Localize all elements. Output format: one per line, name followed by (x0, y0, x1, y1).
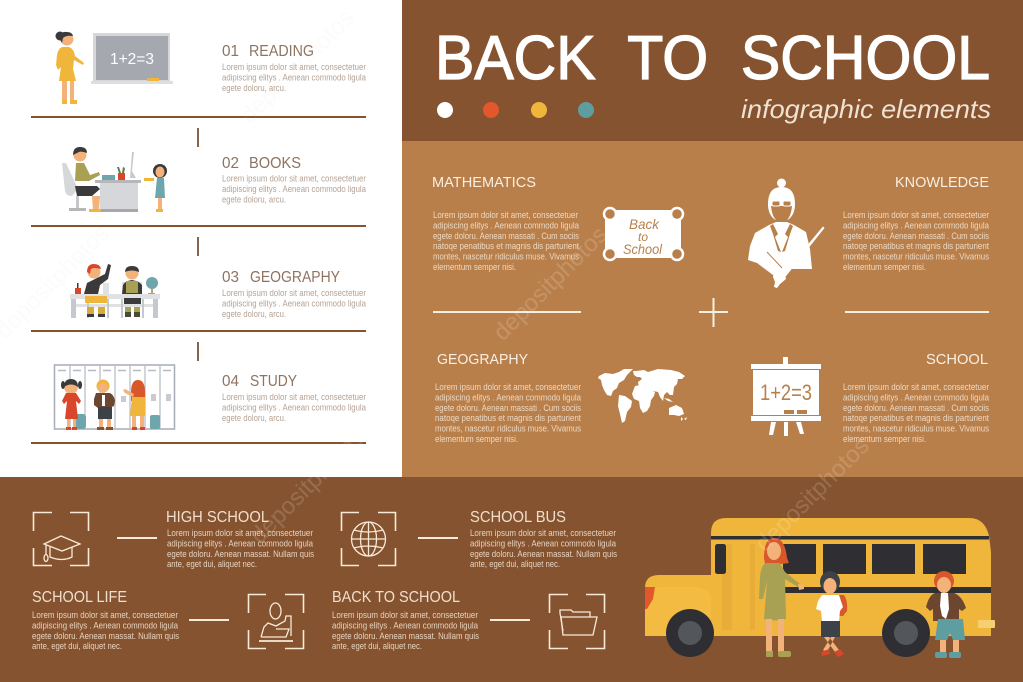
text block: montes, nascetur ridiculus muse. Vivamus (433, 252, 579, 262)
colour dots (437, 102, 594, 118)
text block: egete doloru, arcu. (222, 194, 286, 204)
text block: adipiscing elitys . Aenean commodo ligula (222, 72, 366, 82)
watermarks (0, 4, 875, 557)
text block: adipiscing elitys . Aenean commodo ligula (222, 184, 366, 194)
icon: graduation cap (34, 512, 88, 566)
text block: adipiscing elitys . Aenean commodo ligula (332, 620, 478, 630)
text block: Lorem ipsum dolor sit amet, consectetuer (222, 288, 366, 298)
icon: person at desk (248, 594, 304, 648)
bus (645, 518, 995, 657)
text block: adipiscing elitys . Aenean commodo ligula (222, 402, 366, 412)
panel: title band (402, 0, 1023, 141)
heading: GEOGRAPHY (437, 351, 528, 368)
illustration: teacher at chalkboard: 1+2=3 (110, 51, 154, 68)
text block (222, 288, 366, 319)
heading: 03 geography: 03 (222, 269, 239, 286)
text block: Lorem ipsum dolor sit amet, consectetuer (332, 610, 478, 620)
text block: Lorem ipsum dolor sit amet, consectetuer (167, 528, 313, 538)
panel: back to school (332, 589, 604, 651)
text block: Lorem ipsum dolor sit amet, consectetuer (435, 382, 581, 392)
text block: egete doloru. Aenean massati . Cum sociis (843, 403, 989, 413)
icon: back to school board: to (638, 230, 648, 244)
panel: books (62, 147, 366, 212)
text block: natoqe penatibus et magnis dis parturient (843, 413, 989, 423)
heading: MATHEMATICS (432, 174, 536, 191)
text block: adipiscing elitys . Aenean commodo ligula (433, 220, 579, 230)
text block: Lorem ipsum dolor sit amet, consectetuer (843, 210, 989, 220)
subtitle: infographic elements (741, 94, 991, 124)
panel: school (751, 351, 989, 444)
text block: egete doloru, arcu. (222, 413, 286, 423)
text block: egete doloru, arcu. (222, 83, 286, 93)
text block: montes, nascetur ridiculus muse. Vivamus (843, 424, 989, 434)
text block (222, 392, 366, 423)
icon: world map (598, 369, 687, 423)
watermarks: depositphotos (488, 221, 613, 346)
text block: natoqe penatibus et magnis dis parturient (843, 241, 989, 251)
text block: egete doloru. Aenean massat. Nullam quis (470, 549, 617, 559)
text block: adipiscing elitys . Aenean commodo ligula (435, 392, 581, 402)
text block: ante, eget dui, aliquet nec. (332, 641, 422, 651)
icon: globe (342, 512, 396, 566)
text block: adipiscing elitys . Aenean commodo ligula (222, 298, 366, 308)
text block (222, 62, 366, 93)
illustration: teacher at chalkboard (56, 32, 173, 104)
text block: Lorem ipsum dolor sit amet, consectetuer (222, 62, 366, 72)
panel: mathematics (432, 174, 683, 272)
text block: egete doloru. Aenean massat. Nullam quis (332, 631, 479, 641)
panel: books: BOOKS (249, 155, 301, 172)
icon: easel with sum (751, 357, 821, 436)
text block: montes, nascetur ridiculus muse. Vivamus (843, 252, 989, 262)
heading: SCHOOL LIFE (32, 589, 127, 606)
text block (32, 610, 179, 651)
text block: elementum semper nisi. (435, 434, 518, 444)
text block: adipiscing elitys . Aenean commodo ligula (843, 220, 989, 230)
text block: egete doloru. Aenean massati . Cum sociis (435, 403, 581, 413)
text block: elementum semper nisi. (843, 434, 926, 444)
text block: adipiscing elitys . Aenean commodo ligula (470, 538, 616, 548)
panel: study: STUDY (250, 373, 297, 390)
illustration: pupils at desk (70, 264, 160, 318)
text block: montes, nascetur ridiculus muse. Vivamus (435, 424, 581, 434)
text block: elementum semper nisi. (843, 262, 926, 272)
panel: subjects (402, 141, 1023, 477)
heading: 01 reading: 01 (222, 43, 239, 60)
text block: elementum semper nisi. (433, 262, 516, 272)
panel: geography (70, 264, 366, 319)
text block: Lorem ipsum dolor sit amet, consectetuer (222, 392, 366, 402)
panel: study (54, 365, 366, 430)
watermarks: depositphotos (750, 432, 875, 557)
text block (435, 382, 581, 444)
text block: adipiscing elitys . Aenean commodo ligula (843, 392, 989, 402)
panel: reading: READING (249, 43, 314, 60)
illustration: pupils at lockers (54, 365, 174, 430)
text block: egete doloru, arcu. (222, 309, 286, 319)
text block (470, 528, 617, 569)
panel: geography subject (435, 351, 687, 444)
text block (843, 210, 989, 272)
heading: 04 study: 04 (222, 373, 239, 390)
title: BACK TO SCHOOL (435, 24, 990, 93)
watermarks: depositphotos (245, 424, 370, 549)
icon: back to school board: School (623, 241, 663, 257)
icon: back to school board: Back (629, 216, 660, 232)
panel: reading (56, 32, 366, 104)
heading: BACK TO SCHOOL (332, 589, 460, 606)
text block: adipiscing elitys . Aenean commodo ligula (32, 620, 178, 630)
text block (222, 174, 366, 204)
text block: Lorem ipsum dolor sit amet, consectetuer (843, 382, 989, 392)
panel: high school (34, 509, 314, 569)
text block (332, 610, 479, 651)
pupil with brown jacket (926, 571, 966, 658)
text block (433, 210, 579, 272)
heading: SCHOOL (926, 351, 988, 368)
text block: ante, eget dui, aliquet nec. (167, 559, 257, 569)
text block: Lorem ipsum dolor sit amet, consectetuer (32, 610, 178, 620)
watermarks: depositphotos (235, 4, 360, 129)
panel: school life (32, 589, 304, 651)
text block: egete doloru. Aenean massati . Cum sociis (843, 231, 989, 241)
panel: school bus (342, 509, 617, 569)
icon: teacher with pointer (748, 178, 824, 288)
text block: Lorem ipsum dolor sit amet, consectetuer (433, 210, 578, 220)
illustration: teacher at desk with pupil (62, 147, 167, 212)
panel: geography: GEOGRAPHY (250, 269, 340, 286)
heading: 02 books: 02 (222, 155, 239, 172)
text block: natoqe penatibus et magnis dis parturient (435, 413, 581, 423)
text block (843, 382, 989, 444)
heading: HIGH SCHOOL (166, 509, 269, 526)
text block: egete doloru. Aenean massat. Nullam quis (167, 549, 314, 559)
text block: Lorem ipsum dolor sit amet, consectetuer (222, 174, 366, 184)
illustration: school bus with teacher and pupils (645, 518, 995, 658)
heading: KNOWLEDGE (895, 174, 989, 191)
icon: folder (550, 594, 604, 648)
text block: adipiscing elitys . Aenean commodo ligula (167, 538, 313, 548)
text block: ante, eget dui, aliquet nec. (470, 559, 560, 569)
text block (167, 528, 314, 569)
divider lines and plus (433, 298, 989, 327)
heading: SCHOOL BUS (470, 509, 566, 526)
text block: ante, eget dui, aliquet nec. (32, 641, 122, 651)
text block: egete doloru. Aenean massati . Cum sociis (433, 231, 579, 241)
panel: knowledge (748, 174, 989, 288)
icon: back to school board (604, 208, 683, 260)
text block: natoqe penatibus et magnis dis parturient (433, 241, 579, 251)
text block: egete doloru. Aenean massat. Nullam quis (32, 631, 179, 641)
pupil with red backpack (816, 571, 847, 657)
icon: easel with sum: 1+2=3 (760, 380, 812, 405)
teacher (759, 538, 804, 657)
text block: Lorem ipsum dolor sit amet, consectetuer (470, 528, 616, 538)
panel: bottom band (0, 477, 1023, 682)
